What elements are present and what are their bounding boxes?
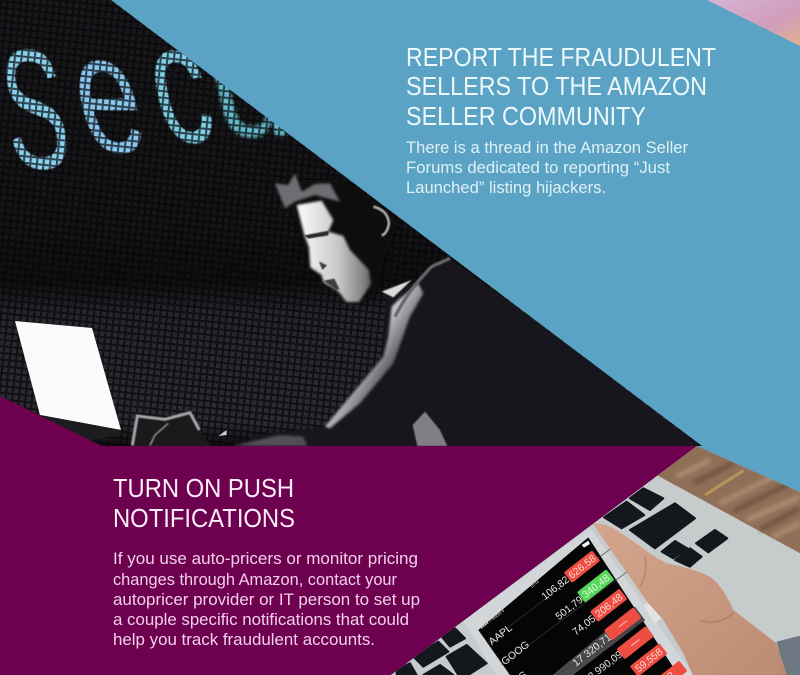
photo: top-right pink corner bbox=[707, 0, 800, 46]
stock rows: AAPL bbox=[487, 623, 515, 648]
body: auto-pricer notifications: a couple specific notifications that could bbox=[113, 611, 409, 629]
stock rows: 17 320,71 bbox=[571, 632, 614, 669]
body: auto-pricer notifications: If you use auto-pricers or monitor pricing bbox=[113, 550, 418, 568]
heading: turn on push notifications: TURN ON PUSH bbox=[113, 475, 294, 503]
heading: turn on push notifications: NOTIFICATIONS bbox=[113, 505, 295, 533]
body: auto-pricer notifications: autopricer provider or IT person to set up bbox=[113, 591, 420, 609]
laptop bbox=[15, 321, 121, 446]
panel: purple band bbox=[0, 396, 697, 675]
sleeve bbox=[777, 635, 800, 675]
stock rows: 501,79 bbox=[554, 594, 586, 623]
body: auto-pricer notifications: help you track fraudulent accounts. bbox=[113, 631, 375, 649]
phone: ●●●● T-Mobile ▾ bbox=[479, 608, 505, 630]
face bbox=[297, 201, 371, 302]
screen lettering: Secu bbox=[6, 48, 288, 170]
stock pills bbox=[564, 550, 687, 675]
arm highlight bbox=[325, 283, 423, 428]
body: auto-pricer notifications bbox=[113, 550, 420, 649]
body: amazon seller forums: There is a thread in the Amazon Seller bbox=[406, 139, 689, 157]
stock pills: 626,58 bbox=[567, 553, 599, 582]
man body bbox=[250, 258, 700, 447]
heading: report the fraudulent sellers bbox=[406, 44, 716, 131]
phone: 10:44 bbox=[529, 579, 541, 589]
stock rows: 106,82 bbox=[540, 574, 572, 603]
hand bbox=[593, 523, 788, 675]
photo: hacker at laptop bbox=[0, 0, 720, 447]
stock pills: 340,48 bbox=[581, 573, 612, 601]
collar bbox=[382, 280, 412, 297]
stock rows: GOOG bbox=[500, 639, 532, 668]
stock pills: — bbox=[615, 616, 631, 632]
stock pills: — bbox=[628, 635, 643, 650]
ear bbox=[373, 207, 389, 235]
keyboard keys bbox=[397, 488, 727, 675]
stock rows bbox=[487, 574, 625, 675]
man head bbox=[275, 173, 450, 317]
text: report fraudulent sellers bbox=[406, 44, 716, 197]
heading: report the fraudulent sellers: SELLER COMMUNITY bbox=[406, 103, 646, 131]
stock rows: 74,05 bbox=[571, 614, 598, 638]
heading: report the fraudulent sellers: SELLERS TO THE AMAZON bbox=[406, 73, 707, 101]
wood desk bbox=[657, 443, 800, 555]
heading: report the fraudulent sellers: REPORT THE FRAUDULENT bbox=[406, 44, 716, 72]
gray row band bbox=[547, 607, 645, 675]
dot grid overlay bbox=[0, 0, 720, 446]
heading: turn on push notifications bbox=[113, 475, 295, 533]
photo: phone in hand on laptop bbox=[380, 440, 800, 675]
body: amazon seller forums: Forums dedicated to reporting “Just bbox=[406, 159, 670, 177]
hair bbox=[275, 173, 340, 208]
body: amazon seller forums: Launched” listing hijackers. bbox=[406, 179, 606, 197]
body: amazon seller forums bbox=[406, 139, 689, 197]
phone bbox=[463, 527, 697, 675]
body: auto-pricer notifications: changes through Amazon, contact your bbox=[113, 571, 397, 589]
hands and sleeve bbox=[132, 412, 447, 446]
stock pills: 206,48 bbox=[594, 592, 625, 620]
stock pills: 59,558 bbox=[634, 647, 665, 675]
screen lettering: Secu: e bbox=[53, 0, 161, 189]
text: turn on push notifications bbox=[113, 475, 420, 649]
